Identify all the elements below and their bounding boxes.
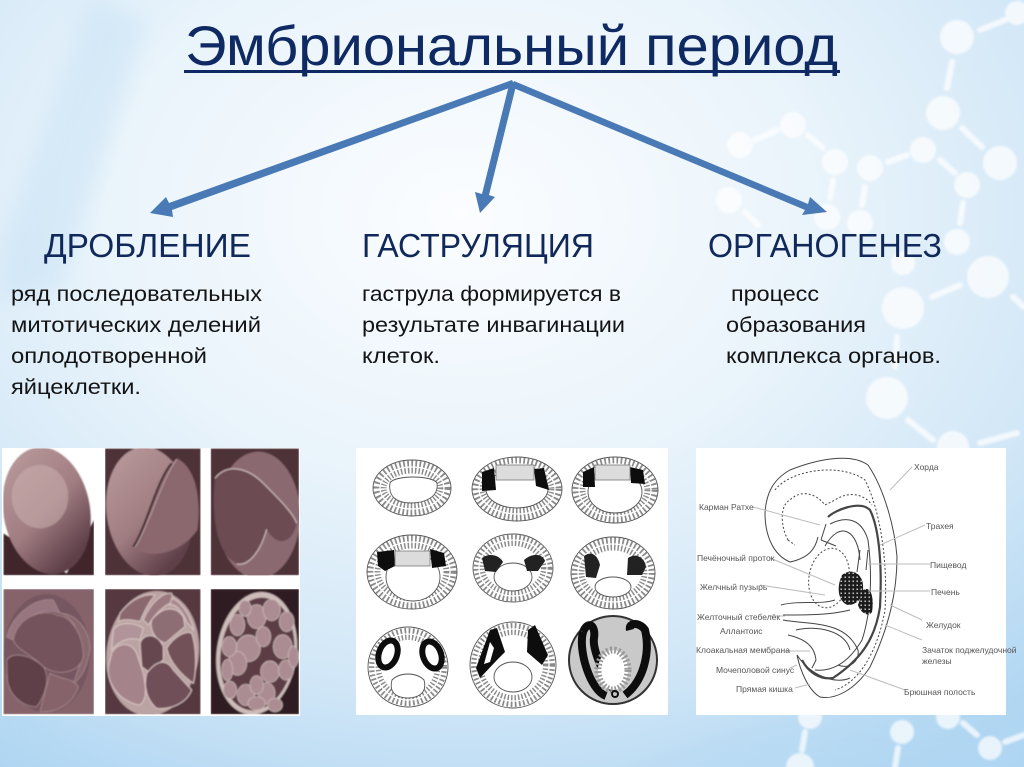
text: organogenesis description: комплекса органов. [726, 345, 941, 368]
text: cleavage description: митотических делений [11, 314, 261, 337]
text: organogenesis description: образования [726, 314, 866, 337]
organ labels: Пищевод [930, 560, 966, 570]
diagram: stage 3 [572, 457, 658, 523]
panel: cleavage micrographs [0, 440, 305, 722]
diagram: stage 1 [373, 460, 451, 516]
text: cleavage description: оплодотворенной [11, 345, 207, 368]
photo: four cells [211, 448, 300, 578]
photo: two cells [105, 448, 201, 576]
diagram: stage 6 [571, 537, 655, 609]
organ labels: Карман Ратхе [699, 502, 754, 512]
panel: organogenesis diagram [696, 448, 1017, 715]
diagram: stage 8 [470, 622, 556, 708]
organ labels: Желудок [926, 620, 961, 630]
diagram: stage 7 [368, 627, 448, 707]
diagram: stage 5 [473, 534, 553, 602]
arrow: to gastrulation [475, 85, 516, 213]
organ labels: Хорда [914, 462, 939, 472]
organ labels: Аллантоис [720, 626, 763, 636]
heading: gastrulation: ГАСТРУЛЯЦИЯ [362, 227, 594, 264]
organ labels: Зачаток поджелудочной [922, 645, 1017, 655]
title: Эмбриональный период [185, 14, 838, 77]
leader lines [753, 467, 930, 690]
diagram: stage 4 [367, 535, 457, 609]
organ labels [696, 462, 1017, 697]
organ labels: Брюшная полость [904, 687, 976, 697]
text: gastrulation description [362, 283, 625, 368]
organ labels: Мочеполовой синус [716, 665, 795, 675]
text: gastrulation description: гаструла формируется в [362, 283, 621, 306]
organ labels: Клоакальная мембрана [696, 645, 790, 655]
organ labels: Прямая кишка [736, 684, 793, 694]
organ labels: железы [922, 656, 952, 666]
arrow: to organogenesis [511, 81, 827, 215]
photo: eight cells [3, 589, 94, 714]
organ labels: Трахея [926, 521, 954, 531]
organ labels: Желточный стебелёк [697, 612, 780, 622]
text: cleavage description: яйцеклетки. [11, 376, 141, 399]
liver and stomach masses [839, 572, 873, 614]
arrow: to cleavage [150, 80, 515, 217]
organ labels: Печёночный проток [697, 553, 775, 563]
heading: organogenesis: ОРГАНОГЕНЕЗ [708, 227, 942, 264]
heading: cleavage: ДРОБЛЕНИЕ [44, 227, 251, 264]
photo: sixteen cells [105, 589, 201, 714]
organ labels: Печень [931, 587, 960, 597]
text: cleavage description [11, 283, 263, 399]
molecule background decoration [716, 1, 1024, 767]
photo: one cell [3, 448, 94, 576]
text: organogenesis description: процесс [731, 283, 819, 306]
text: cleavage description: ряд последовательных [11, 283, 263, 306]
text: gastrulation description: результате инвагинации [362, 314, 625, 337]
photo: morula [210, 589, 299, 714]
organ labels: Желчный пузырь [700, 582, 768, 592]
diagram: stage 2 [472, 457, 562, 521]
text: gastrulation description: клеток. [362, 345, 440, 368]
diagram: stage 9 [569, 616, 657, 704]
panel: gastrulation diagrams [356, 448, 668, 715]
embryo drawing [765, 458, 897, 698]
text: organogenesis description [726, 283, 941, 368]
